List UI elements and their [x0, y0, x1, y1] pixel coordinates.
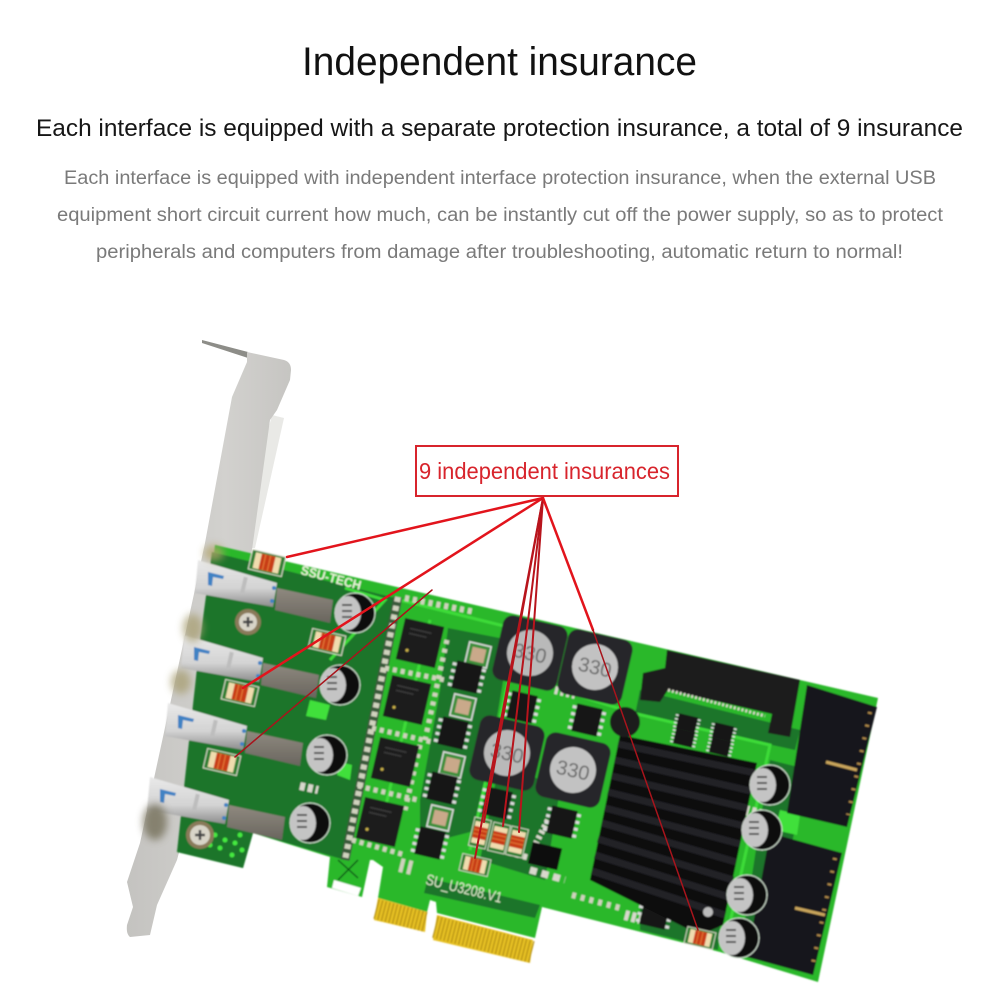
SATA power connector — [640, 650, 800, 737]
bright green traces — [330, 588, 770, 945]
circuit board — [147, 545, 878, 982]
regulator — [528, 842, 562, 870]
title: Independent insurance — [302, 40, 697, 84]
board silkscreen labels: SU_U3208.V1 — [424, 871, 504, 907]
mounting screws — [186, 609, 261, 849]
SO-8 MOSFETs — [410, 660, 737, 930]
inductors marked 330: 330 — [554, 757, 592, 785]
black heatsink — [590, 707, 757, 935]
USB ports — [147, 560, 333, 840]
controller chips — [356, 618, 444, 847]
SMD component columns — [300, 597, 760, 919]
board silkscreen labels — [299, 562, 504, 907]
callout box: 9 independent insurances — [416, 446, 678, 496]
keying tab marking — [332, 860, 361, 896]
description text block: equipment short circuit current how much, can be instantly cut off the power supply, so as to protect — [57, 205, 944, 226]
inductors marked 330 — [467, 613, 635, 810]
right-side capacitors — [719, 765, 790, 958]
metal bracket — [127, 340, 291, 937]
dark green copper areas — [177, 552, 810, 950]
USB header connectors — [747, 685, 877, 975]
inductors marked 330: 330 — [511, 640, 549, 668]
callout box: 9 independent insurances: 9 independent insurances — [419, 458, 670, 484]
screw holes and dots — [208, 832, 244, 858]
PCIe gold fingers — [374, 898, 533, 963]
connector ferrules behind USB ports — [143, 545, 224, 840]
description text block — [57, 168, 944, 263]
description text block: peripherals and computers from damage after troubleshooting, automatic return to normal! — [96, 242, 903, 263]
USB capacitors — [290, 593, 375, 843]
bright green pads — [306, 700, 800, 835]
small sensors — [427, 642, 491, 831]
inductors marked 330: 330 — [576, 654, 614, 682]
description text block: Each interface is equipped with independent interface protection insurance, when the external USB — [64, 168, 936, 189]
board silkscreen labels: SSU-TECH — [299, 562, 363, 593]
red leader lines — [235, 498, 698, 930]
nine fuses — [203, 549, 716, 950]
PCIe card photo illustration — [127, 340, 878, 982]
subtitle: Each interface is equipped with a separate protection insurance, a total of 9 insurance — [36, 115, 963, 142]
inductors marked 330: 330 — [488, 740, 526, 768]
